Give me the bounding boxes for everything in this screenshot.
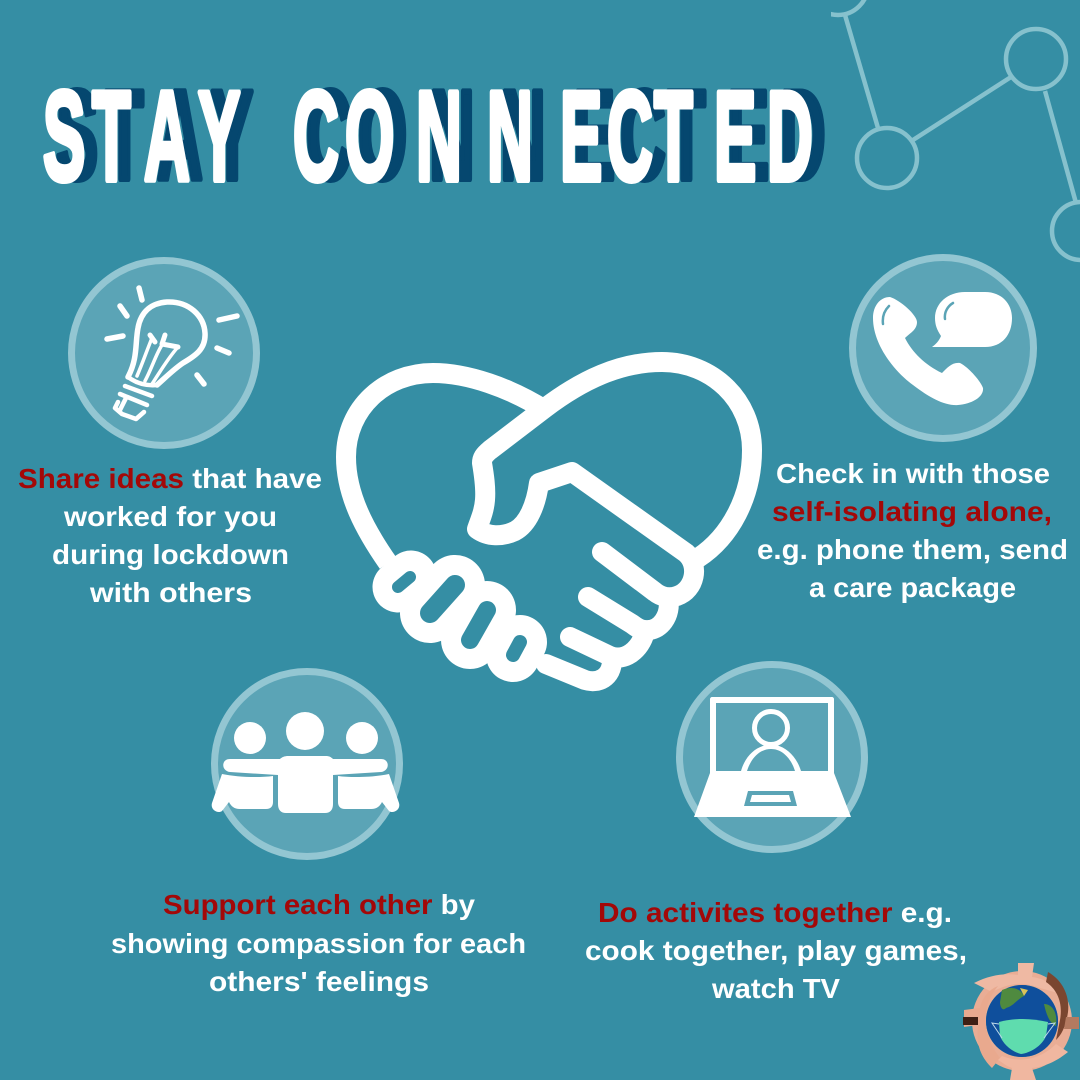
text: do activities: Do activites together e.g. xyxy=(598,897,952,928)
icon: group of three people xyxy=(212,672,400,856)
text: support each other: others' feelings xyxy=(209,966,429,997)
text: support each other: Support each other by xyxy=(163,889,475,920)
title: STAY CONNECTED xyxy=(43,66,813,208)
network decoration xyxy=(808,0,1080,260)
icon: light bulb xyxy=(72,260,256,446)
text: share ideas: with others xyxy=(89,577,252,608)
text: do activities xyxy=(585,897,967,1004)
text: check in: e.g. phone them, send xyxy=(757,534,1068,565)
text: do activities: cook together, play games, xyxy=(585,935,967,966)
left heart lobe xyxy=(346,373,545,563)
upper fingers xyxy=(588,597,669,630)
icon: laptop with person xyxy=(680,664,864,850)
text: do activities: watch TV xyxy=(711,973,840,1004)
text: check in: a care package xyxy=(809,572,1016,603)
text: share ideas xyxy=(18,463,322,608)
icon: phone and speech bubble xyxy=(852,258,1034,438)
right heart lobe and upper hand xyxy=(477,362,752,597)
text: check in: Check in with those xyxy=(776,458,1050,489)
title: STAY CONNECTED xyxy=(56,65,826,207)
text: check in xyxy=(757,458,1068,603)
text: support each other xyxy=(111,889,526,997)
text: share ideas: Share ideas that have xyxy=(18,463,322,494)
logo: globe with mask in hands xyxy=(963,963,1079,1080)
handshake heart icon xyxy=(346,362,752,681)
lower fingers xyxy=(398,576,520,655)
text: check in: self-isolating alone, xyxy=(772,496,1052,527)
text: support each other: showing compassion for each xyxy=(111,928,526,959)
text: share ideas: during lockdown xyxy=(52,539,289,570)
text: share ideas: worked for you xyxy=(63,501,277,532)
